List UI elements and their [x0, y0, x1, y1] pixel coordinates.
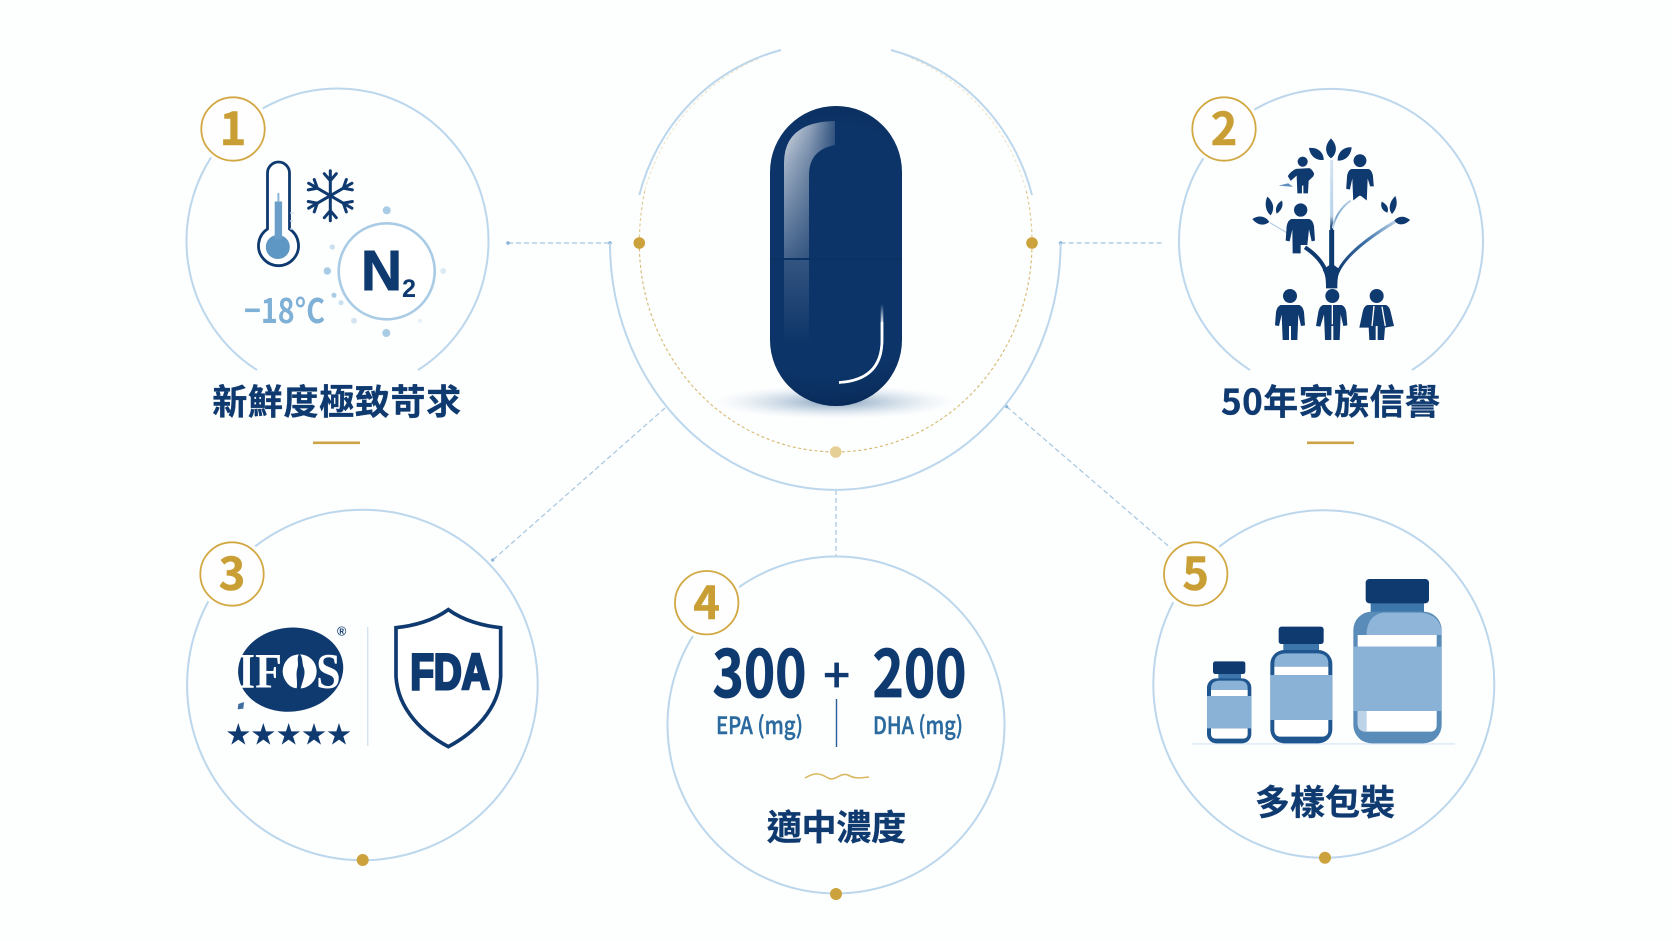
ring [1179, 89, 1483, 370]
small bottle [1207, 661, 1251, 743]
badge 5 [1160, 538, 1232, 610]
temperature: −18°C [244, 284, 325, 333]
branches [1270, 160, 1395, 288]
icon: IFOS logo [227, 622, 350, 745]
panel: center capsule [610, 50, 1061, 490]
badge 1: 1 [220, 93, 246, 158]
large bottle [1353, 579, 1442, 743]
icon: IFOS logo: ® [337, 625, 347, 639]
connectors [491, 241, 1173, 562]
ring [668, 556, 1004, 894]
icon: bottles [1192, 579, 1455, 744]
node [357, 854, 369, 866]
panel: certifications [187, 510, 538, 866]
ring [186, 88, 488, 370]
ring [187, 510, 538, 860]
panel: family reputation [1179, 89, 1483, 444]
badge 3 [196, 538, 268, 610]
capsule shadow [713, 385, 957, 419]
infographic canvas [186, 49, 1496, 900]
panel: moderate concentration [668, 556, 1004, 900]
icon: family tree [1252, 138, 1410, 340]
badge 5: 5 [1182, 538, 1209, 603]
gold nodes [634, 237, 1038, 458]
gold dashed ring [639, 58, 1032, 452]
icon: FDA shield [396, 610, 501, 747]
icon: nitrogen [324, 206, 446, 337]
medium bottle [1270, 627, 1332, 743]
capsule [770, 106, 902, 406]
icon: nitrogen: 2 [402, 275, 416, 303]
panel: packaging [1153, 510, 1494, 864]
node [1319, 852, 1331, 864]
underline [1307, 442, 1354, 444]
title: 適中濃度 [767, 800, 906, 851]
icon: IFOS logo: IFOS [238, 643, 341, 699]
title: 50年家族信譽 [1221, 374, 1440, 426]
stars [227, 723, 350, 745]
badge 2 [1188, 93, 1260, 165]
icon: FDA shield: FDA [410, 644, 490, 700]
panel: freshness [186, 88, 488, 444]
badge 4 [671, 567, 743, 639]
DHA label: DHA (mg) [873, 706, 963, 741]
divider [367, 627, 368, 746]
leaves [1252, 138, 1410, 225]
icon: nitrogen: N [361, 239, 402, 303]
badge 3: 3 [219, 538, 245, 603]
badge 2: 2 [1211, 93, 1237, 158]
icon: thermometer [259, 162, 298, 266]
ring [1153, 510, 1494, 858]
badge 1 [197, 93, 269, 165]
EPA amount: 300 [712, 622, 806, 716]
title: 新鮮度極致苛求 [212, 374, 461, 426]
plus: + [823, 638, 850, 706]
outer ring arcs [610, 50, 1061, 490]
title: 多樣包裝 [1255, 775, 1395, 826]
node [830, 888, 842, 900]
wave [805, 774, 869, 779]
people [1275, 154, 1394, 340]
underline [313, 442, 360, 444]
icon: snowflake [306, 171, 355, 221]
badge 4: 4 [693, 567, 720, 632]
separator [836, 699, 837, 747]
DHA amount: 200 [872, 622, 966, 716]
EPA label: EPA (mg) [716, 706, 803, 741]
